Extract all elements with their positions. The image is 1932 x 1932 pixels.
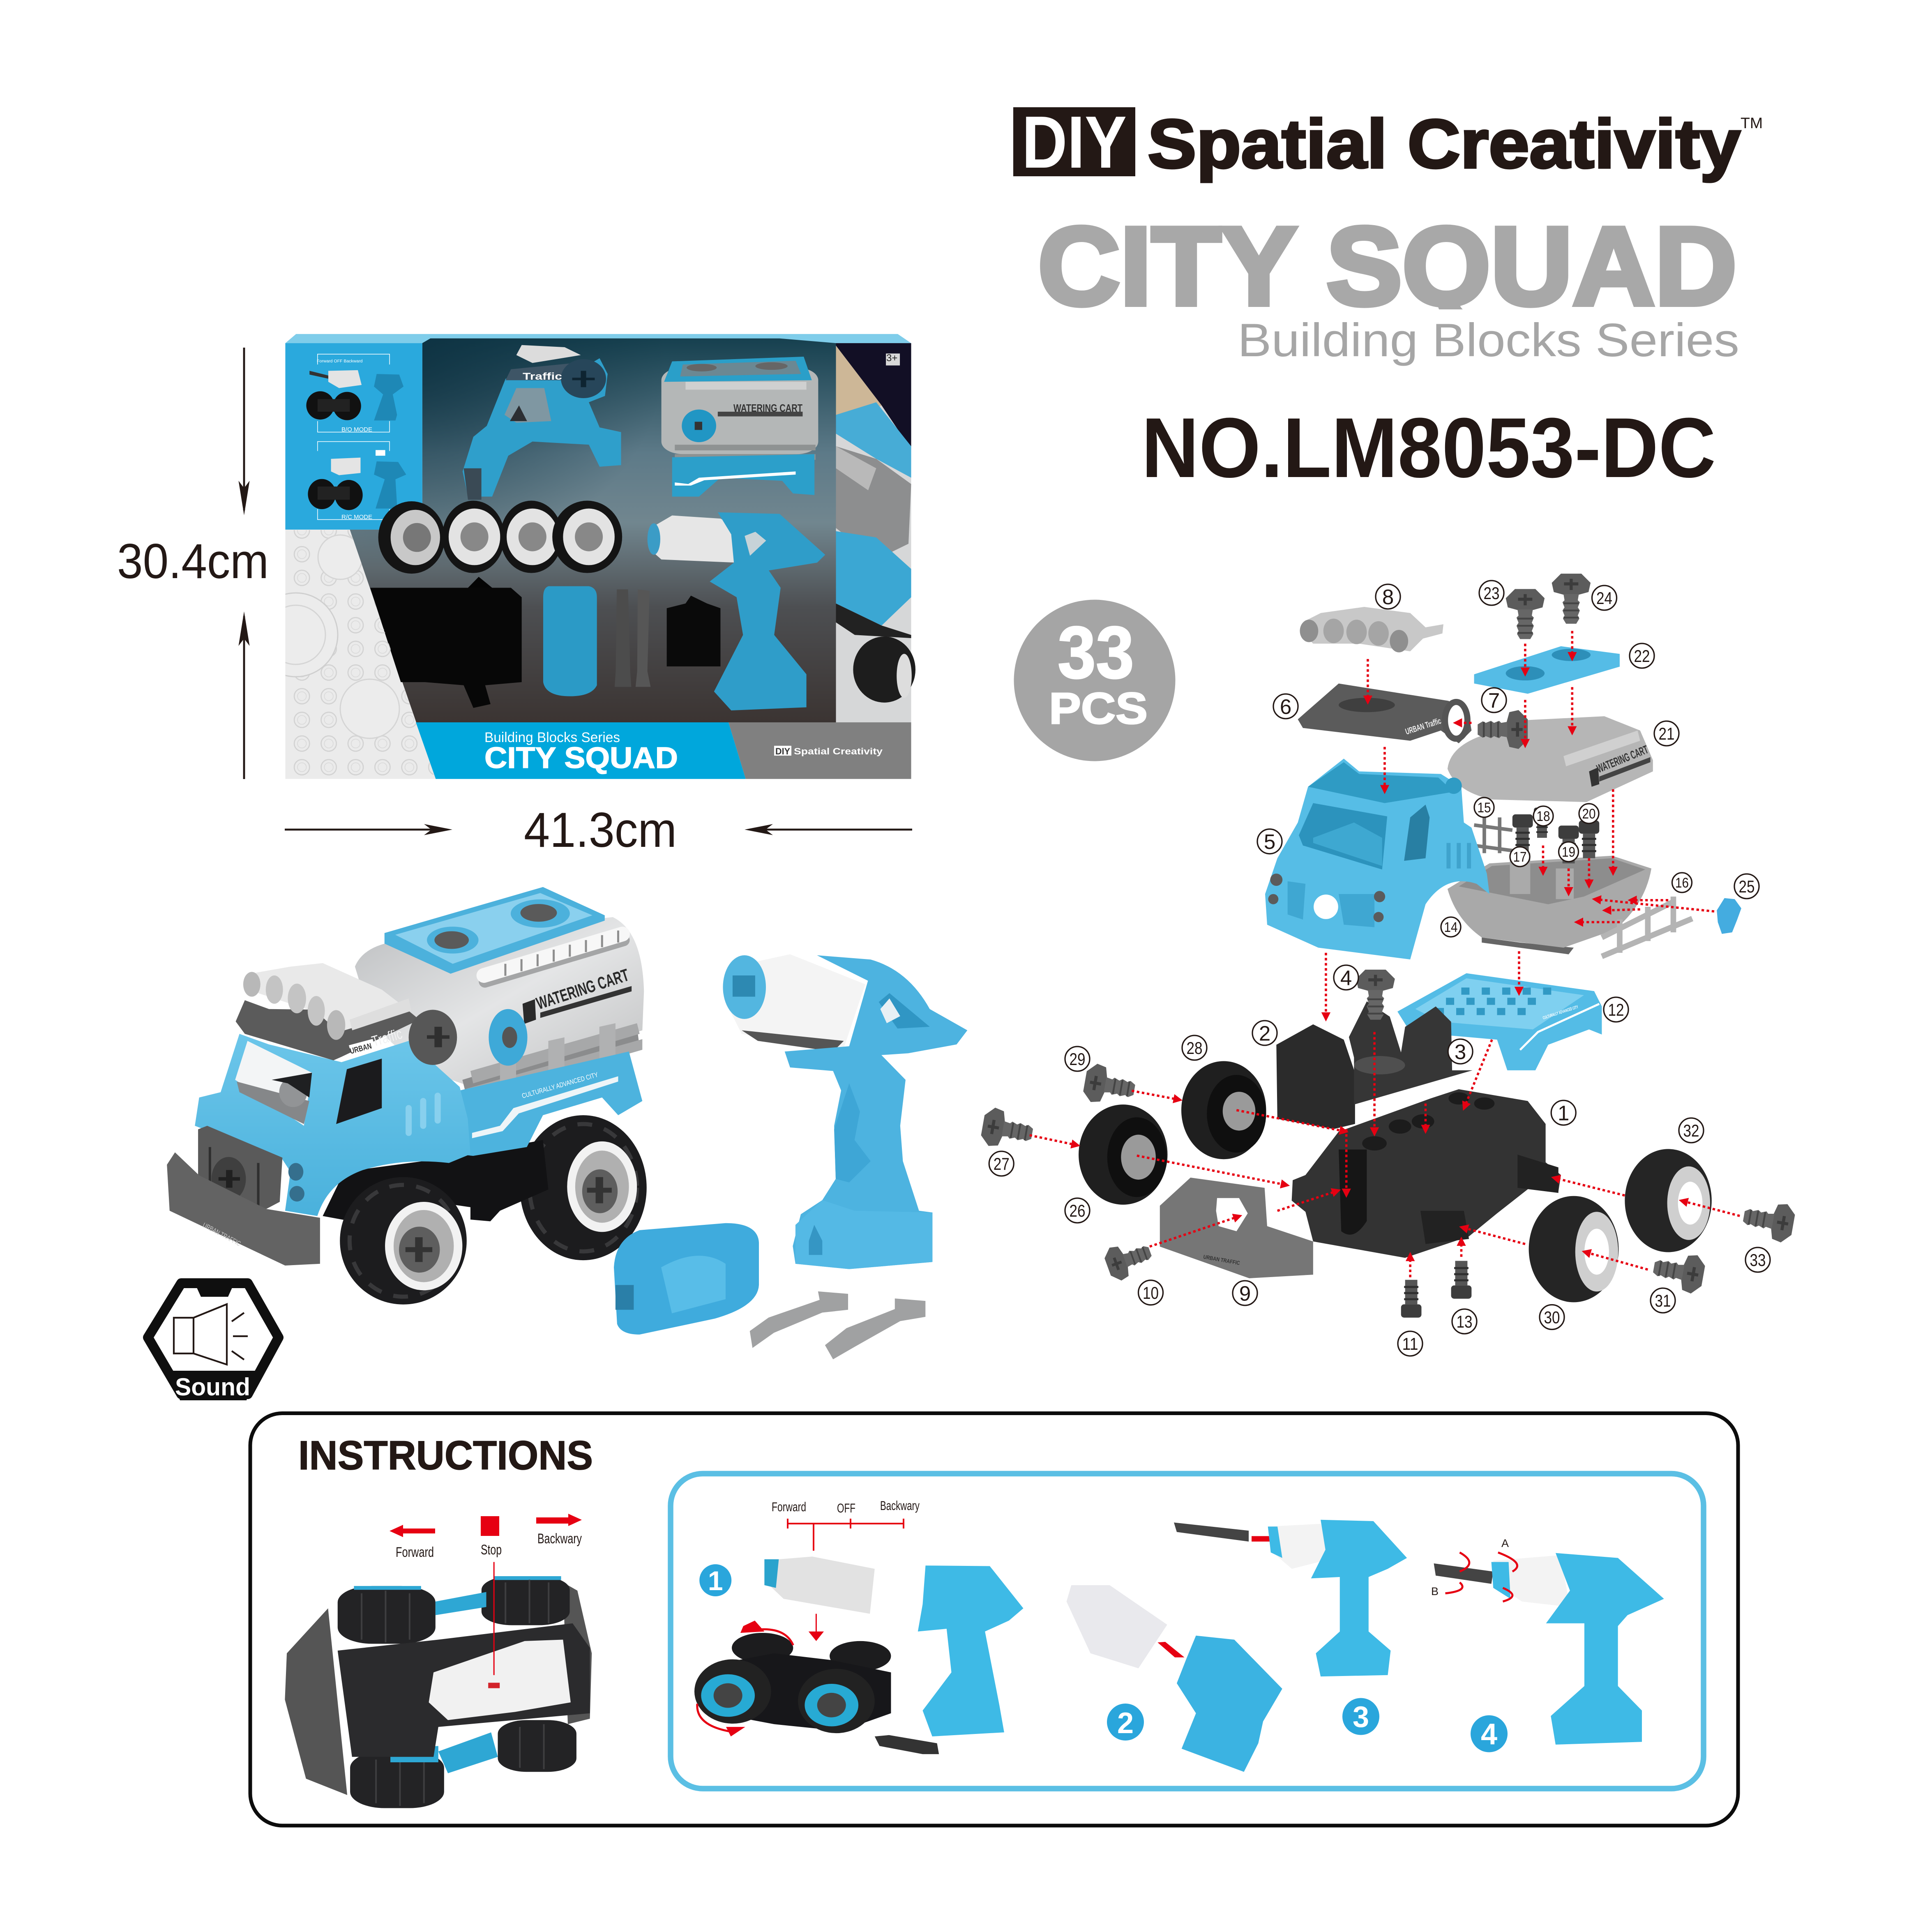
bits bbox=[750, 1291, 848, 1348]
numbered callouts: 3 bbox=[1455, 1040, 1466, 1063]
step 1 switch legend bbox=[772, 1498, 920, 1551]
brand logo: DIY bbox=[1022, 101, 1127, 184]
truck labels: WATERING CART bbox=[534, 965, 632, 1013]
box: labels: Spatial Creativity bbox=[794, 746, 883, 756]
box: labels: Building Blocks Series bbox=[484, 730, 620, 745]
item: screwdrivers bbox=[615, 589, 631, 687]
width dimension bbox=[285, 802, 912, 858]
part 1 chassis bbox=[1292, 1089, 1561, 1258]
truck labels: URBAN TRAFFIC bbox=[201, 1222, 242, 1247]
title baseline mask bbox=[1337, 309, 1492, 329]
part 16 fence bbox=[1602, 897, 1692, 957]
switch legend: forward stop backward: Stop bbox=[481, 1542, 502, 1558]
switch legend: forward stop backward: Backwary bbox=[537, 1531, 582, 1547]
numbered callouts: 29 bbox=[1070, 1049, 1086, 1069]
part text labels: CULTURALLY ADVANCED CITY bbox=[1542, 1005, 1579, 1021]
step 1 switch legend: Backwary bbox=[880, 1498, 920, 1513]
heading: instructions: INSTRUCTIONS bbox=[298, 1432, 593, 1478]
part 25 knob bbox=[1717, 898, 1741, 934]
item: wheels bbox=[378, 501, 445, 574]
height dimension: 30.4cm bbox=[117, 534, 269, 589]
cab screw bbox=[409, 1010, 457, 1065]
numbered callouts: 27 bbox=[994, 1154, 1010, 1173]
numbered callouts bbox=[989, 581, 1770, 1356]
tank side knob bbox=[489, 1009, 528, 1066]
brand logo: TM bbox=[1741, 114, 1763, 131]
infographic canvas bbox=[119, 107, 1795, 1828]
drill bbox=[723, 954, 967, 1269]
red assembly guide arrows bbox=[1030, 631, 1740, 1277]
numbered callouts: 19 bbox=[1562, 844, 1575, 860]
height dimension bbox=[117, 348, 269, 779]
panel: assembly steps bbox=[671, 1474, 1704, 1789]
step 3: drill with bit bbox=[1174, 1520, 1407, 1676]
numbered callouts: 24 bbox=[1596, 588, 1612, 608]
roof bbox=[236, 1000, 420, 1061]
part text labels bbox=[1203, 716, 1650, 1266]
step number badges: 1 bbox=[708, 1565, 723, 1596]
box artwork pieces bbox=[285, 334, 915, 779]
underside of car bbox=[285, 1562, 592, 1808]
step graphics bbox=[694, 1520, 1664, 1772]
badge: 33 pcs bbox=[1014, 600, 1176, 761]
tank body bbox=[355, 917, 644, 1087]
step 1: gun shell bbox=[918, 1565, 1024, 1736]
truck labels: CULTURALLY ADVANCED CITY bbox=[521, 1071, 599, 1100]
part 28 wheel bbox=[1181, 1061, 1266, 1159]
item: chassis bbox=[370, 588, 522, 708]
battery bbox=[614, 1223, 759, 1335]
title: city squad: CITY SQUAD bbox=[1038, 205, 1737, 328]
vents bbox=[409, 1096, 438, 1133]
step 1 switch legend: Forward bbox=[772, 1499, 806, 1514]
step 4: drill rotation bbox=[1434, 1552, 1664, 1745]
step 1: car bbox=[694, 1621, 939, 1754]
step 1 switch legend: OFF bbox=[837, 1501, 855, 1515]
numbered callouts: 33 bbox=[1750, 1250, 1766, 1270]
part 15 fence bbox=[1474, 817, 1512, 853]
box: labels: WATERING CART bbox=[733, 403, 802, 414]
part 21 tank top bbox=[1448, 716, 1653, 802]
numbered callouts: 20 bbox=[1582, 806, 1596, 822]
badge: 33 pcs: 33 bbox=[1058, 611, 1134, 694]
panel: product box bbox=[254, 334, 915, 779]
numbered callouts: 11 bbox=[1402, 1334, 1418, 1353]
part text labels: URBAN Traffic bbox=[1404, 716, 1442, 737]
box: labels: Traffic bbox=[523, 371, 562, 382]
model number: NO.LM8053-DC bbox=[1141, 400, 1716, 495]
step 2: motor and shell bbox=[1067, 1585, 1282, 1772]
box: labels: Forward OFF Backward bbox=[317, 359, 363, 364]
subtitle: series: Building Blocks Series bbox=[1238, 314, 1739, 367]
box: rings pattern bbox=[285, 530, 434, 775]
numbered callouts: 31 bbox=[1655, 1291, 1671, 1310]
front wheel bbox=[340, 1177, 467, 1305]
item: motor bbox=[667, 596, 720, 666]
part 30 wheel bbox=[1529, 1196, 1618, 1302]
truck labels: URBAN bbox=[349, 1042, 373, 1056]
chassis and wheel arch backing bbox=[323, 1140, 549, 1225]
box: labels: DIY bbox=[775, 746, 790, 756]
part text labels: URBAN TRAFFIC bbox=[1203, 1254, 1240, 1266]
item: battery bbox=[543, 586, 597, 696]
step number badges: 3 bbox=[1353, 1701, 1369, 1734]
exploded parts diagram bbox=[980, 574, 1796, 1356]
part 8 exhaust bbox=[1300, 607, 1443, 652]
item: cab bbox=[463, 358, 621, 497]
part 9 bumper bbox=[1160, 1178, 1313, 1278]
box: labels: B/O MODE bbox=[341, 426, 372, 433]
part 22 plate bbox=[1474, 646, 1620, 694]
truck labels: Traffic bbox=[370, 1025, 404, 1050]
rear wheel bbox=[520, 1115, 647, 1260]
brand logo: Spatial Creativity bbox=[1148, 105, 1741, 182]
switch legend: forward stop backward: Forward bbox=[396, 1545, 434, 1560]
icon: sound bbox=[148, 1283, 279, 1401]
part 26 wheel bbox=[1079, 1104, 1167, 1205]
rails bbox=[462, 1027, 640, 1101]
icon: sound: Sound bbox=[175, 1373, 250, 1401]
box: labels bbox=[317, 353, 897, 775]
numbered callouts: 12 bbox=[1608, 1000, 1624, 1019]
numbered callouts: 21 bbox=[1659, 724, 1675, 743]
numbered callouts: 26 bbox=[1070, 1201, 1086, 1220]
part 32 wheel bbox=[1625, 1149, 1712, 1252]
part 5 cab bbox=[1265, 759, 1489, 959]
panel: instructions bbox=[250, 1413, 1738, 1826]
tank ribs bbox=[485, 940, 624, 982]
numbered callouts: 17 bbox=[1513, 849, 1527, 865]
numbered callouts: 25 bbox=[1739, 877, 1755, 896]
numbered callouts: 9 bbox=[1239, 1282, 1251, 1305]
part 3 seat block bbox=[1349, 1001, 1473, 1104]
numbered callouts: 14 bbox=[1444, 920, 1458, 935]
mini instruction graphics bbox=[318, 354, 390, 519]
numbered callouts: 28 bbox=[1187, 1038, 1203, 1058]
side window bbox=[336, 1058, 382, 1124]
numbered callouts: 15 bbox=[1478, 800, 1491, 816]
numbered callouts: 32 bbox=[1683, 1121, 1699, 1140]
box: labels: R/C MODE bbox=[341, 514, 372, 521]
width dimension: 41.3cm bbox=[524, 802, 677, 858]
brand logo bbox=[1013, 101, 1763, 184]
numbered callouts: 6 bbox=[1280, 695, 1291, 718]
numbered callouts: 7 bbox=[1488, 689, 1500, 712]
rotation labels: B bbox=[1431, 1585, 1439, 1598]
numbered callouts: 4 bbox=[1340, 966, 1352, 989]
item: drill bbox=[650, 515, 758, 563]
step number badges bbox=[699, 1564, 1508, 1752]
part 6 roof bbox=[1298, 684, 1471, 743]
numbered callouts: 18 bbox=[1537, 809, 1550, 824]
truck labels bbox=[201, 965, 632, 1247]
windshield bbox=[235, 1041, 312, 1126]
numbered callouts: 10 bbox=[1143, 1283, 1159, 1303]
item: tank bbox=[662, 368, 818, 454]
part text labels: WATERING CART bbox=[1595, 743, 1650, 775]
numbered callouts: 23 bbox=[1484, 583, 1500, 603]
watering label marks bbox=[523, 999, 536, 1024]
numbered callouts: 22 bbox=[1634, 646, 1650, 666]
lower body bbox=[457, 1051, 642, 1156]
part 14 tank bottom bbox=[1448, 853, 1651, 954]
part 2 motor bbox=[1276, 1024, 1355, 1129]
numbered callouts: 30 bbox=[1544, 1308, 1560, 1327]
rotation labels: A bbox=[1501, 1537, 1509, 1549]
rotation labels bbox=[1431, 1537, 1509, 1598]
switch legend: forward stop backward bbox=[390, 1514, 582, 1560]
numbered callouts: 16 bbox=[1675, 875, 1689, 891]
box: labels: CITY SQUAD bbox=[484, 742, 678, 775]
box: labels: 3+ bbox=[886, 353, 897, 364]
numbered callouts: 1 bbox=[1558, 1101, 1569, 1125]
exhaust bbox=[250, 963, 409, 1032]
step 1: motor unit bbox=[764, 1556, 875, 1641]
numbered callouts: 5 bbox=[1264, 830, 1275, 853]
numbered callouts: 8 bbox=[1382, 585, 1394, 609]
step number badges: 4 bbox=[1481, 1718, 1497, 1751]
screws bbox=[980, 574, 1796, 1318]
part 12 base bbox=[1397, 973, 1602, 1070]
step number badges: 2 bbox=[1117, 1707, 1134, 1740]
numbered callouts: 2 bbox=[1259, 1021, 1270, 1045]
cab bbox=[195, 1034, 470, 1216]
tank lid bbox=[385, 887, 605, 974]
numbered callouts: 13 bbox=[1457, 1312, 1473, 1331]
badge: 33 pcs: PCS bbox=[1049, 683, 1148, 733]
truck and drill product photo bbox=[167, 887, 967, 1359]
grille and bumper bbox=[198, 1126, 282, 1209]
